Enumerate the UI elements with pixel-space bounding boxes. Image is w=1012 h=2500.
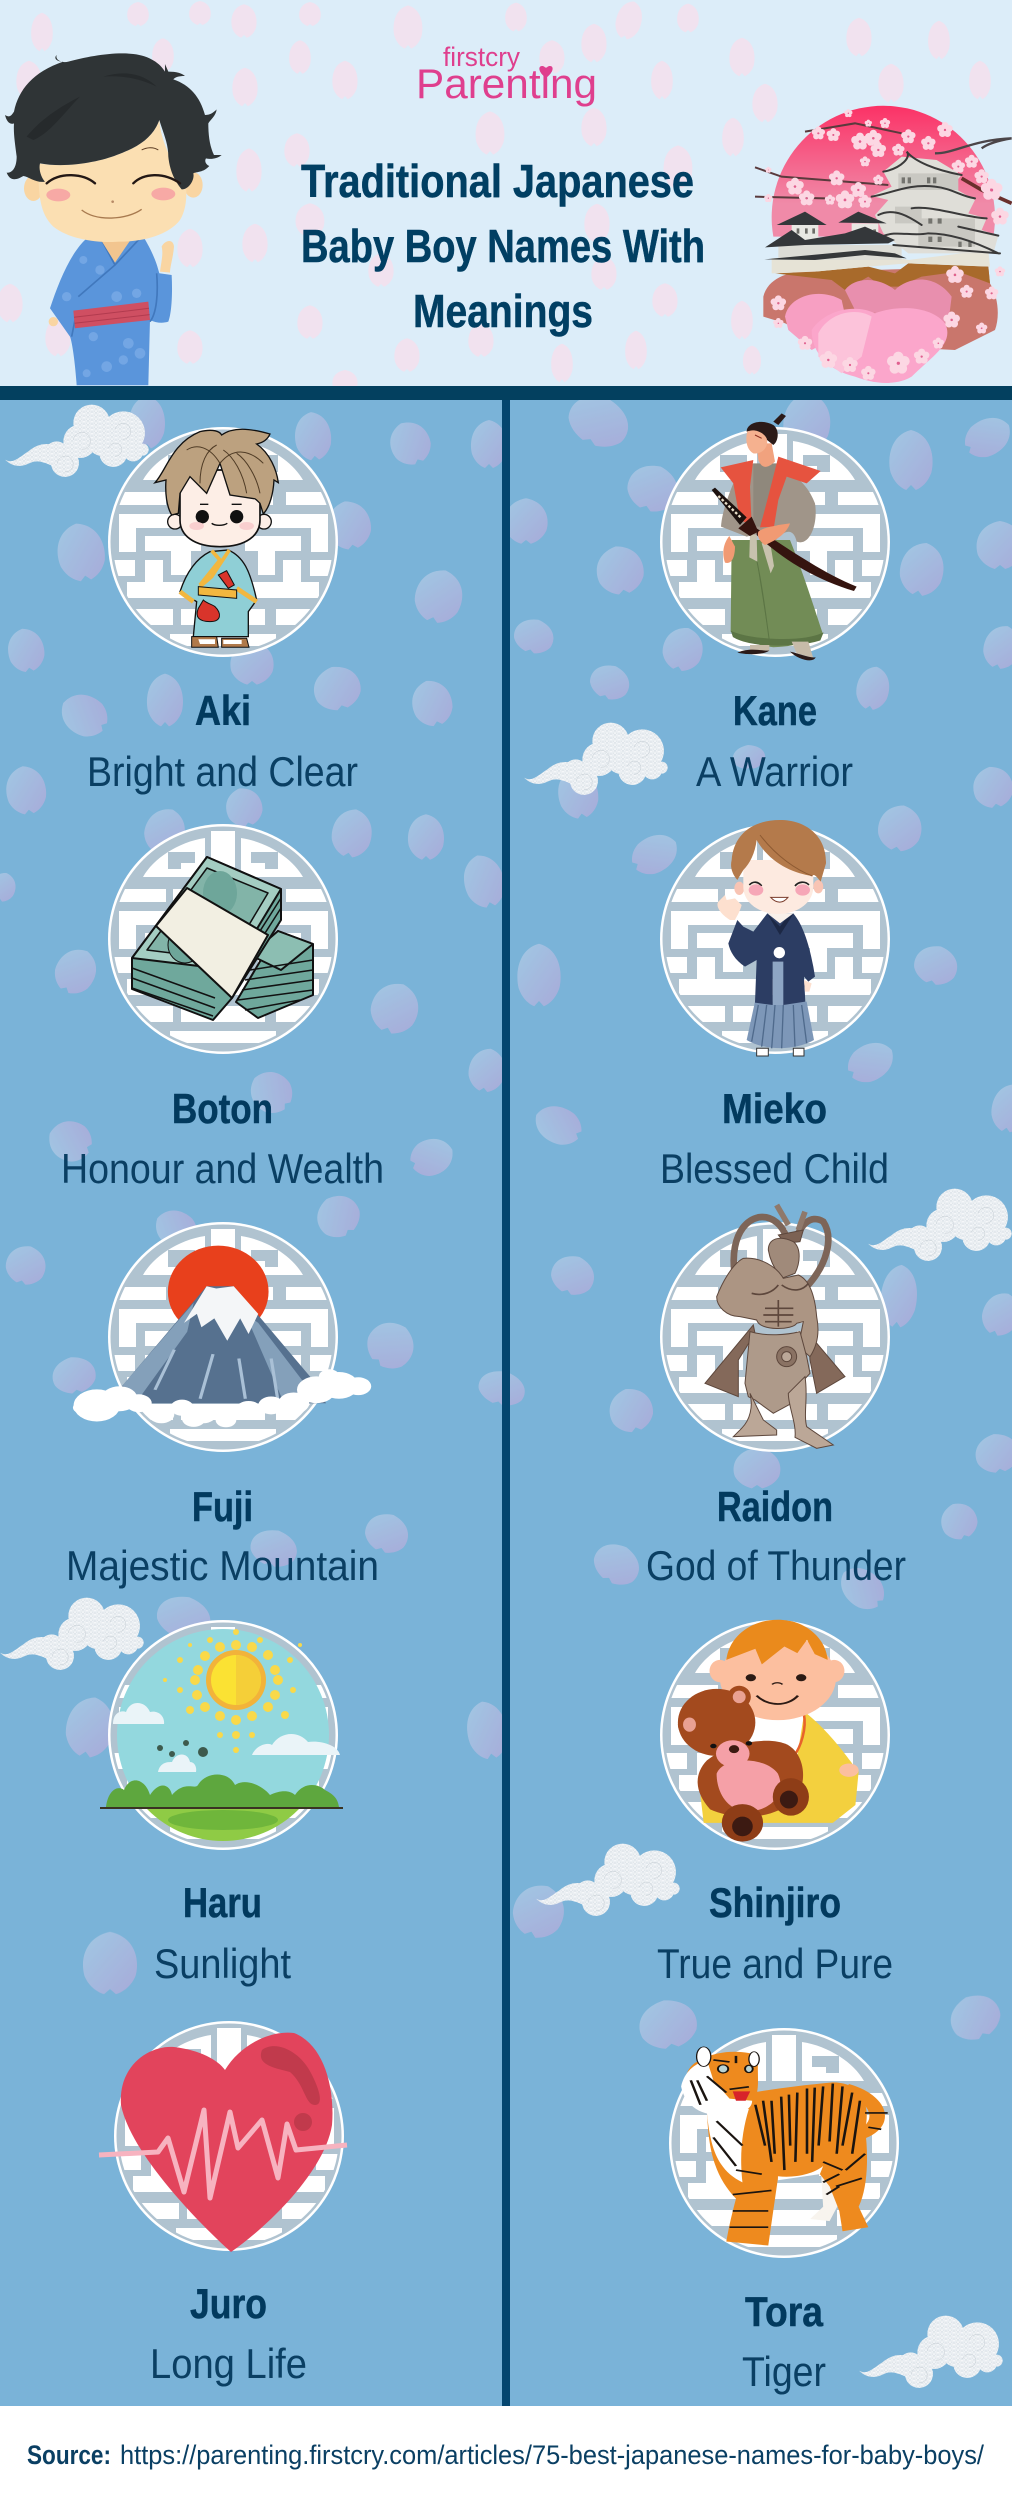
panel: Tora <box>669 2028 899 2395</box>
meaning: Sunlight: Sunlight <box>154 1940 291 1987</box>
panel: Juro <box>99 2021 347 2387</box>
name: Aki: Aki <box>195 687 251 734</box>
panel: Aki <box>87 427 358 795</box>
panel: Kane <box>660 413 890 795</box>
maze medallion <box>114 2021 344 2251</box>
title: Traditional Japanese <box>301 155 694 207</box>
maze medallion <box>108 824 338 1054</box>
cloud <box>5 405 149 477</box>
maze medallion <box>669 2028 899 2258</box>
icon: boy in navy hakama <box>717 820 826 1056</box>
header boy illustration <box>5 53 222 385</box>
icon: baby with teddy bear <box>678 1620 859 1842</box>
header bottom bar <box>0 386 1012 400</box>
cloud <box>859 2316 1003 2388</box>
name: Juro: Juro <box>190 2280 267 2327</box>
title <box>301 155 705 337</box>
name: Haru: Haru <box>183 1879 262 1926</box>
logo: FirstCry Parenting: firstcry <box>443 42 520 72</box>
meaning: Honour and Wealth: Honour and Wealth <box>61 1145 384 1192</box>
logo: FirstCry Parenting: Parenting <box>416 60 597 107</box>
cloud <box>868 1189 1012 1261</box>
panel: Haru <box>100 1620 350 1987</box>
panel: Mieko <box>660 820 890 1192</box>
icon: money bundles <box>132 857 313 1020</box>
title: Baby Boy Names With <box>301 220 705 272</box>
maze medallion <box>108 1222 338 1452</box>
panel: Boton <box>61 824 384 1192</box>
meaning: Blessed Child: Blessed Child <box>660 1145 889 1192</box>
maze medallion <box>660 1620 890 1850</box>
header petals <box>0 0 991 394</box>
icon: Raijin statue <box>705 1205 845 1448</box>
name: Raidon: Raidon <box>717 1483 833 1530</box>
center divider line <box>502 400 510 2406</box>
icon: sunlight landscape <box>100 1620 350 1847</box>
name: Shinjiro: Shinjiro <box>709 1879 841 1926</box>
meaning: Bright and Clear: Bright and Clear <box>87 748 358 795</box>
name: Fuji: Fuji <box>192 1483 253 1530</box>
panel: Raidon <box>646 1205 906 1589</box>
maze medallion <box>660 824 890 1054</box>
icon: tiger <box>681 2047 888 2246</box>
icon: samurai <box>712 413 857 660</box>
meaning: God of Thunder: God of Thunder <box>646 1542 906 1589</box>
meaning: Long Life: Long Life <box>150 2340 307 2387</box>
header background <box>0 0 1012 386</box>
castle and cherry blossom illustration <box>755 106 1012 383</box>
meaning: True and Pure: True and Pure <box>657 1940 893 1987</box>
maze medallion <box>108 1620 338 1850</box>
source footer: Source: <box>27 2440 111 2470</box>
icon: boy in light blue kimono <box>155 429 278 647</box>
cloud <box>0 1598 144 1670</box>
panel: Fuji <box>66 1222 379 1589</box>
panel: Shinjiro <box>657 1620 893 1987</box>
meaning: Tiger: Tiger <box>742 2348 826 2395</box>
maze medallion <box>108 427 338 657</box>
maze medallion <box>660 1222 890 1452</box>
name: Tora: Tora <box>745 2288 824 2335</box>
meaning: A Warrior: A Warrior <box>696 748 853 795</box>
cloud <box>536 1844 680 1916</box>
meaning: Majestic Mountain: Majestic Mountain <box>66 1542 379 1589</box>
name: Mieko: Mieko <box>722 1085 827 1132</box>
name: Boton: Boton <box>172 1085 273 1132</box>
blue panel petals <box>0 386 1012 2053</box>
icon: heart with pulse line <box>99 2033 347 2252</box>
name: Kane: Kane <box>733 687 817 734</box>
cloud <box>524 723 668 795</box>
icon: Mount Fuji with red sun <box>73 1246 371 1427</box>
title: Meanings <box>413 285 593 337</box>
maze medallion <box>660 427 890 657</box>
source footer: https://parenting.firstcry.com/articles/75-best-japanese-names-for-baby-boys/ <box>120 2440 984 2470</box>
